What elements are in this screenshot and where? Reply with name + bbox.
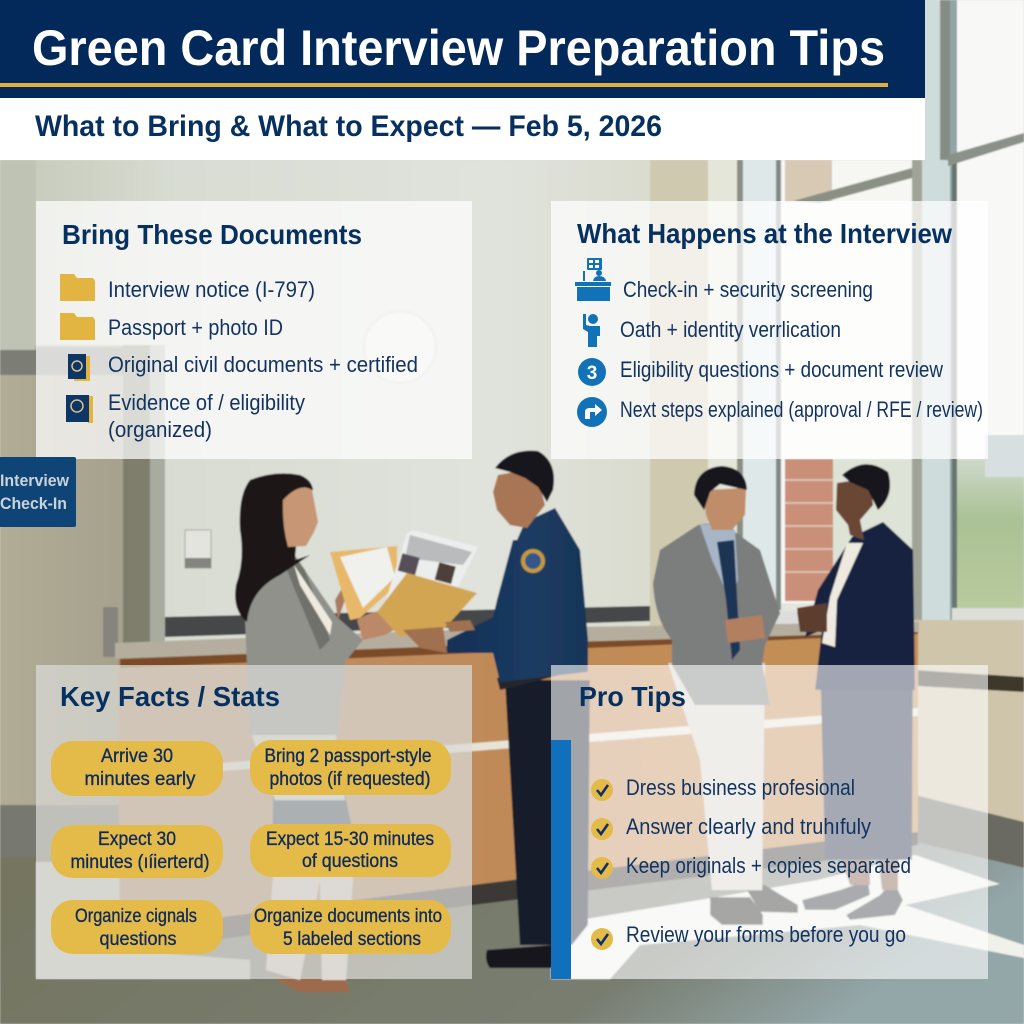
stat pill: questions time: Expect 15-30 minutes bbox=[266, 829, 434, 850]
title: Green Card Interview Preparation Tips bbox=[32, 20, 885, 76]
person: woman with folder bbox=[235, 473, 405, 992]
stat pill: organize signals: Organize cignals bbox=[75, 906, 197, 927]
stat pill: labeled sections: 5 labeled sections bbox=[283, 929, 421, 950]
panel: what happens at the interview bbox=[551, 201, 988, 459]
icon: next steps arrow bbox=[577, 397, 607, 427]
back wall bbox=[0, 160, 708, 660]
item: oath: Oath + identity verrlication bbox=[620, 317, 841, 342]
stat pill: passport photos: Bring 2 passport-style bbox=[264, 746, 432, 767]
stat pill: arrive early: minutes early bbox=[84, 769, 196, 790]
tip: answer: Answer clearly and truhıfuly bbox=[626, 814, 871, 839]
item: interview notice: Interview notice (I-797) bbox=[108, 277, 315, 302]
door handle bbox=[103, 607, 118, 657]
panel: bring these documents bbox=[36, 201, 472, 459]
icon: number three bbox=[578, 358, 606, 386]
icon: passport bbox=[66, 395, 93, 423]
item: check-in: Check-in + security screening bbox=[623, 277, 873, 302]
panel: key facts and stats bbox=[36, 665, 472, 979]
stat pill: expect 30 minutes: Expect 30 bbox=[98, 829, 176, 850]
heading: Bring These Documents bbox=[62, 219, 362, 250]
stat pill: questions time: of questions bbox=[302, 851, 398, 872]
item: eligibility questions: Eligibility questions + document review bbox=[620, 357, 943, 382]
stat pill: organize signals bbox=[51, 900, 223, 954]
tip: dress: Dress business profesional bbox=[626, 775, 855, 800]
door sign: interview check-in: Check-In bbox=[0, 494, 67, 513]
panel: pro tips bbox=[551, 665, 988, 979]
stat pill: expect 30 minutes: minutes (ıíierterd) bbox=[70, 852, 210, 873]
person: man in grey suit bbox=[653, 466, 798, 925]
heading: Pro Tips bbox=[579, 681, 686, 712]
wall plaque bbox=[185, 530, 211, 568]
stat pill: questions time bbox=[250, 824, 451, 877]
icon: folder bbox=[60, 274, 95, 301]
window bay bbox=[708, 0, 1024, 620]
tip: originals: Keep originals + copies separated bbox=[626, 853, 911, 878]
documents and folder bbox=[330, 530, 478, 637]
door sign: interview check-in bbox=[0, 457, 76, 527]
tip: review forms: Review your forms before you go bbox=[626, 922, 906, 947]
subtitle: What to Bring & What to Expect — Feb 5, 2026 bbox=[35, 110, 662, 143]
header banner bbox=[0, 0, 925, 98]
item: passport: Passport + photo ID bbox=[108, 315, 283, 340]
reception counter bbox=[115, 622, 919, 953]
heading: What Happens at the Interview bbox=[577, 218, 952, 249]
item: organized: (organized) bbox=[108, 417, 212, 442]
stat pill: passport photos: photos (if requested) bbox=[270, 769, 430, 790]
accent bar bbox=[551, 740, 571, 979]
stat pill: expect 30 minutes bbox=[51, 825, 223, 878]
person: uniformed officer bbox=[403, 451, 590, 968]
stat pill: passport photos bbox=[250, 740, 451, 795]
right beige wall bbox=[915, 620, 1024, 868]
left wainscot bbox=[0, 805, 120, 857]
icon: folder bbox=[60, 313, 95, 340]
door sign: interview check-in: Interview bbox=[0, 471, 70, 490]
stat pill: labeled sections: Organize documents into bbox=[254, 906, 442, 927]
stat pill: labeled sections bbox=[250, 900, 451, 954]
icon: raised hand person bbox=[583, 314, 600, 347]
subtitle band bbox=[0, 98, 925, 160]
stat pill: arrive early bbox=[51, 741, 223, 796]
beige wall section bbox=[650, 160, 708, 630]
icon: passport bbox=[68, 354, 90, 381]
person: woman in navy suit bbox=[797, 464, 915, 920]
stat pill: organize signals: questions bbox=[100, 929, 176, 950]
heading: Key Facts / Stats bbox=[60, 681, 280, 712]
icon: check-in desk bbox=[575, 258, 611, 301]
item: civil documents: Original civil documents + certified bbox=[108, 352, 418, 377]
item: evidence of eligibility: Evidence of / eligibility bbox=[108, 390, 305, 415]
gold rule bbox=[0, 83, 888, 87]
floor bbox=[0, 842, 1024, 1024]
wall lamp bbox=[364, 311, 436, 383]
door and frame bbox=[0, 160, 165, 810]
stat pill: arrive early: Arrive 30 bbox=[101, 746, 173, 767]
dark wall rail bbox=[165, 606, 650, 637]
sunlight on floor bbox=[551, 855, 1024, 979]
icon: number three: 3 bbox=[587, 363, 597, 384]
